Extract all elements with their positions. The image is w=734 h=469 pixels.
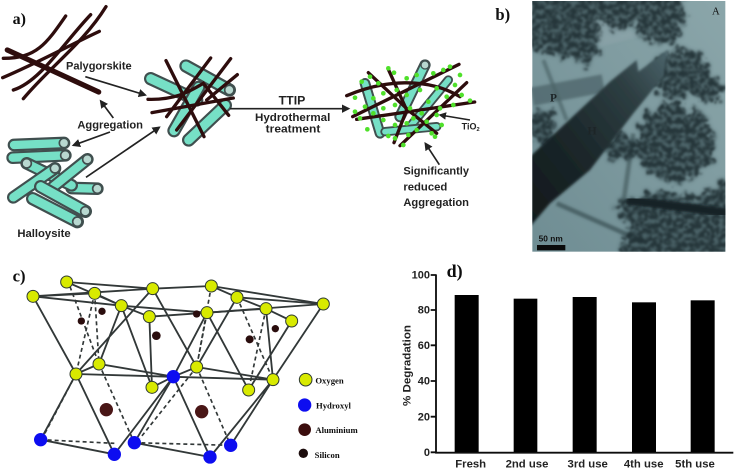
palygorskite fibres bbox=[3, 7, 106, 99]
TiO2 label and arrow: 2 bbox=[476, 127, 480, 133]
micrograph letters bbox=[550, 7, 720, 137]
label c): c) bbox=[13, 267, 26, 286]
label b): b) bbox=[495, 5, 510, 24]
y axis: 80 bbox=[418, 305, 430, 317]
legend: Hydroxyl bbox=[316, 401, 352, 411]
hydroxyl atoms bbox=[34, 370, 237, 464]
TiO2 label and arrow bbox=[440, 115, 480, 133]
reaction arrow bbox=[230, 106, 349, 111]
solid bonds bbox=[33, 282, 323, 457]
label Hydrothermal treatment bbox=[255, 112, 330, 135]
x axis labels bbox=[455, 458, 715, 469]
panel a: TTIP step and result bbox=[230, 61, 480, 209]
label Aggregation: Aggregation bbox=[77, 120, 143, 132]
dark fibre bbox=[627, 200, 730, 213]
centre cluster of tubes and fibres bbox=[148, 58, 237, 140]
bars bbox=[455, 295, 715, 452]
legend: Oxygen bbox=[315, 376, 344, 386]
reduced aggregation label and arrow: reduced bbox=[403, 181, 447, 193]
aluminium atoms bbox=[100, 403, 208, 418]
panel b: TEM micrograph bbox=[495, 0, 733, 263]
oxygen atoms bbox=[27, 276, 329, 396]
label a): a) bbox=[13, 11, 26, 28]
legend: Silicon bbox=[315, 450, 340, 460]
reduced aggregation label and arrow bbox=[403, 143, 470, 209]
legend: Aluminium bbox=[315, 425, 358, 435]
panel c: crystal structure bbox=[13, 267, 358, 464]
micrograph letters: A bbox=[712, 7, 720, 18]
micrograph image bbox=[520, 0, 733, 263]
silicon atoms bbox=[78, 308, 279, 343]
reduced aggregation label and arrow: Significantly bbox=[403, 166, 470, 178]
micrograph letters: P bbox=[550, 93, 557, 105]
cluster haze bbox=[520, 0, 733, 263]
nanoparticle clusters bbox=[520, 0, 733, 263]
label Hydrothermal treatment: treatment bbox=[266, 123, 321, 135]
reduced aggregation label and arrow: Aggregation bbox=[403, 197, 469, 209]
micrograph letters: H bbox=[587, 123, 597, 137]
y axis: 20 bbox=[418, 411, 430, 423]
halloysite tube bbox=[530, 50, 668, 227]
y axis: 100 bbox=[412, 269, 430, 281]
y axis: 60 bbox=[418, 340, 430, 352]
y axis: 0 bbox=[424, 447, 430, 459]
y axis bbox=[412, 269, 733, 459]
arrows bbox=[73, 77, 159, 177]
panel a: palygorskite and halloysite aggregation bbox=[3, 7, 237, 240]
y axis: 40 bbox=[418, 376, 430, 388]
dashed bonds bbox=[41, 286, 273, 445]
scale bar bbox=[537, 233, 565, 250]
scale bar: 50 nm bbox=[539, 233, 563, 243]
panel d: bar chart of % degradation bbox=[402, 261, 733, 469]
y axis title: % Degradation bbox=[402, 325, 414, 406]
TiO2 label and arrow: TiO bbox=[462, 121, 476, 131]
legend bbox=[298, 373, 358, 460]
label d): d) bbox=[447, 261, 463, 282]
label Halloysite: Halloysite bbox=[17, 228, 71, 240]
label Palygorskite: Palygorskite bbox=[66, 60, 132, 72]
palygorskite fibres bbox=[532, 20, 643, 242]
halloysite tubes bbox=[13, 138, 102, 226]
label TTIP: TTIP bbox=[279, 94, 305, 108]
label Hydrothermal treatment: Hydrothermal bbox=[255, 112, 330, 124]
composite with TiO2 particles bbox=[347, 61, 475, 146]
